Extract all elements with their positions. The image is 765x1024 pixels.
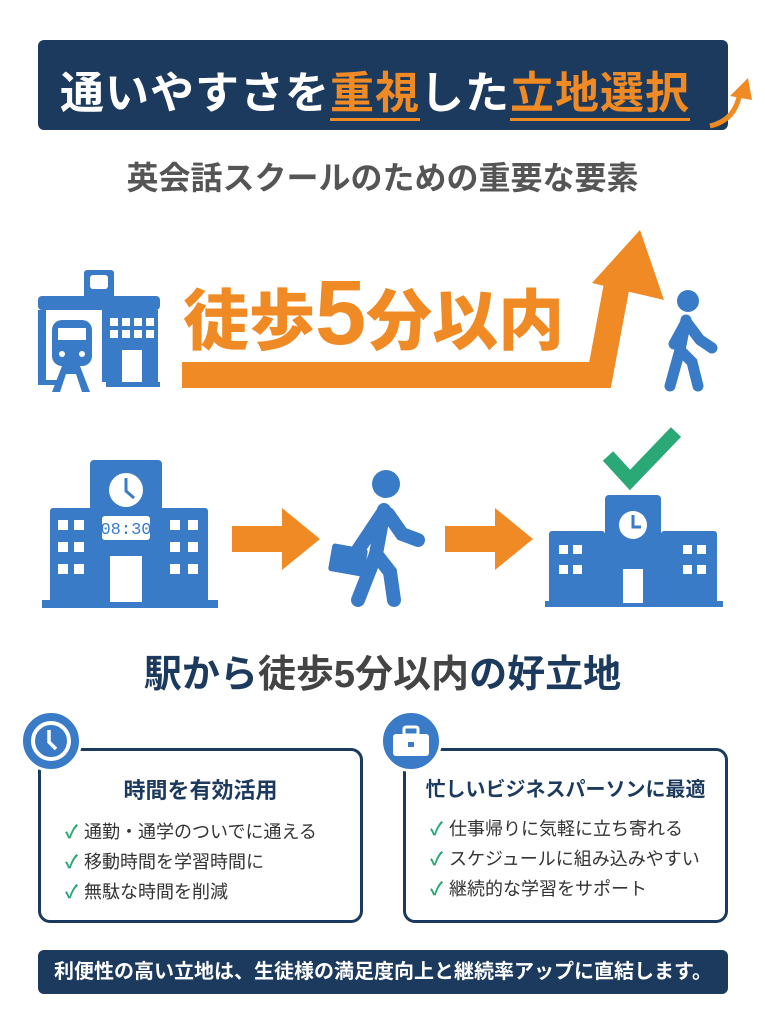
panel: time: [38, 748, 363, 923]
list: ✓ 仕事帰りに気軽に立ち寄れる: [430, 819, 683, 839]
icon: office building: [42, 460, 218, 608]
list: ✓ 無駄な時間を削減: [65, 882, 228, 902]
title bar: [38, 40, 728, 130]
list: ✓ 通勤・通学のついでに通える: [65, 822, 317, 842]
headline: 徒歩5分以内: 徒歩5分以内: [183, 262, 564, 364]
title text: 通いやすさを重視した立地選択: [60, 69, 690, 118]
icon: station: [38, 270, 160, 392]
icon: briefcase circle: [380, 710, 442, 772]
arrow 1: [232, 508, 320, 570]
list: [430, 819, 700, 899]
icon: office building: 08:30: [100, 521, 152, 540]
icon: title arrow: [710, 78, 752, 128]
icon: check mark: [602, 427, 681, 490]
list: ✓ 継続的な学習をサポート: [430, 879, 647, 899]
footer bar: [38, 950, 728, 994]
footer bar: 利便性の高い立地は、生徒様の満足度向上と継続率アップに直結します。: [54, 961, 712, 983]
orange L-arrow: [182, 230, 664, 388]
icon: school building: [545, 495, 723, 607]
panel: business: [403, 748, 728, 923]
list: ✓ 移動時間を学習時間に: [65, 852, 264, 872]
icon: businessman walking: [328, 470, 425, 607]
panel title: 忙しいビジネスパーソンに最適: [426, 779, 706, 801]
panel title: 時間を有効活用: [123, 778, 278, 803]
subheading: 駅から徒歩5分以内の好立地: [144, 654, 621, 696]
list: [65, 822, 317, 902]
subtitle: 英会話スクールのための重要な要素: [126, 160, 638, 196]
icon: walker: [664, 290, 718, 392]
icon: clock circle: [20, 710, 82, 772]
arrow 2: [445, 508, 533, 570]
list: ✓ スケジュールに組み込みやすい: [430, 849, 700, 869]
